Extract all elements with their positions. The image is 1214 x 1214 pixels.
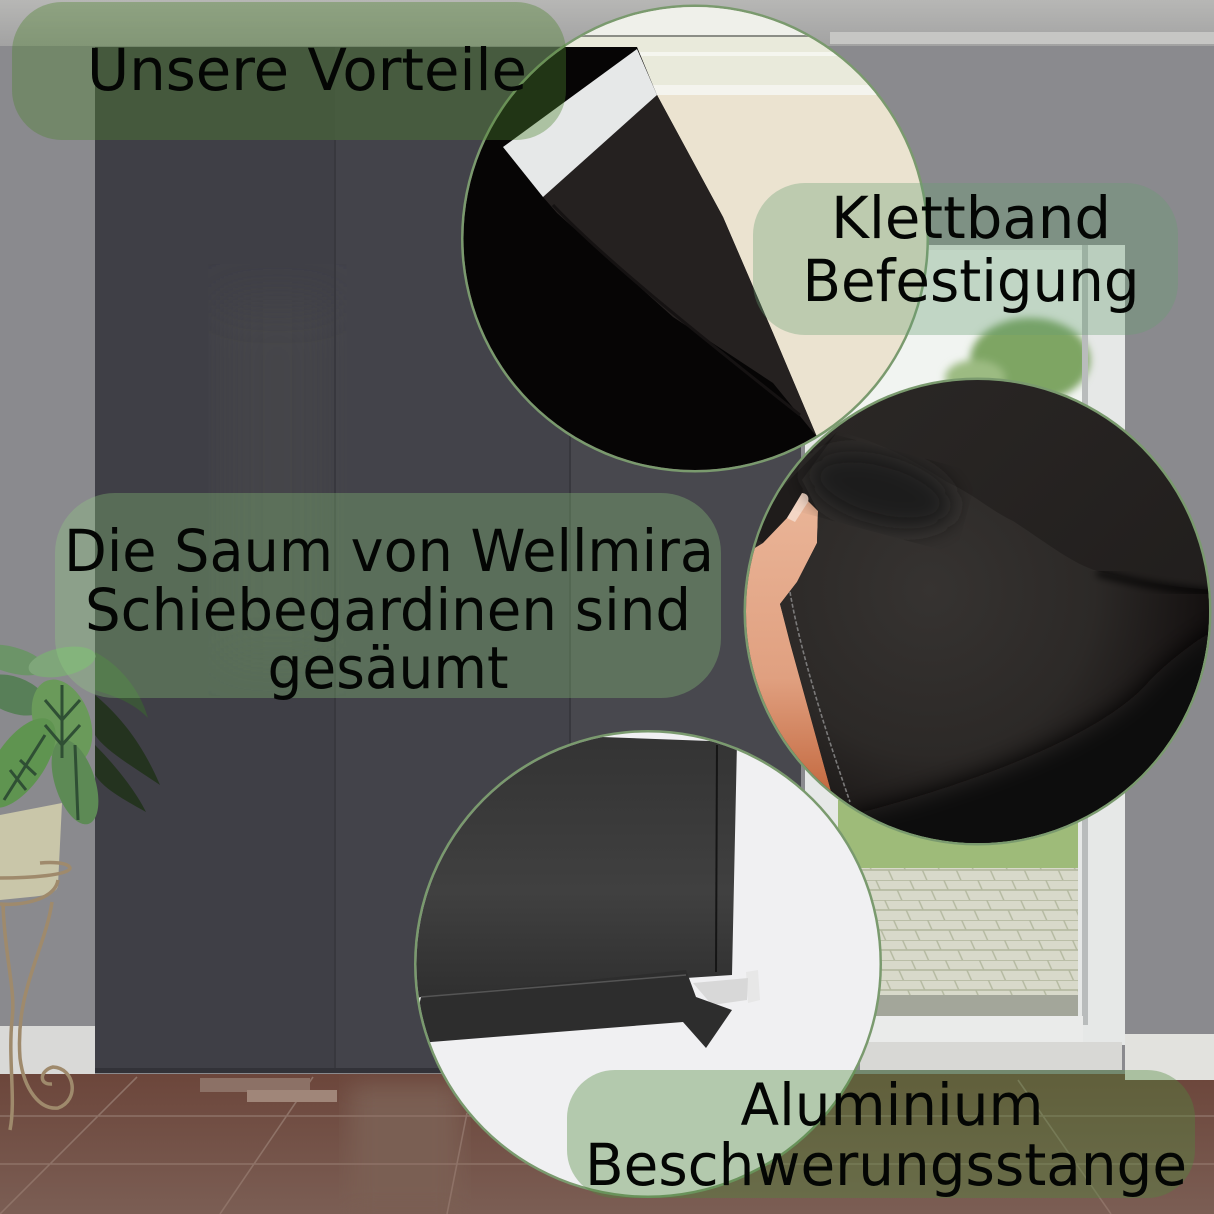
front fabric fold [780,432,1214,860]
window [805,245,1125,1070]
header banner: Unsere Vorteile [12,2,566,140]
callout: Klettband Befestigung: Klettband [831,184,1111,252]
callout: Aluminium Beschwerungsstange: Beschwerungsstange [585,1131,1187,1199]
velcro strip [503,49,657,197]
floor [0,1026,1214,1214]
callout: Klettband Befestigung [753,183,1178,335]
plant on stand [0,639,160,1130]
hand [746,501,831,791]
callout: Saum description: Schiebegardinen sind [85,576,691,644]
callout: Saum description: Die Saum von Wellmira [64,517,714,585]
callout: Aluminium Beschwerungsstange [567,1070,1195,1199]
sliding curtain panels [95,47,801,1073]
pot [0,803,62,900]
callout: Klettband Befestigung: Befestigung [802,247,1140,315]
black inner fabric [450,47,817,480]
callout: Saum description: gesäumt [268,634,508,702]
photo circle: hand holding hem [735,375,1214,870]
photo circle: velcro strip detail [450,0,940,480]
heading: Unsere Vorteile [87,36,527,104]
photo circle: aluminium weight bar [410,725,890,1205]
brown outer fold [543,95,817,437]
callout: Saum description [55,493,721,702]
stand [0,863,72,1130]
callout: Aluminium Beschwerungsstange: Aluminium [740,1071,1044,1139]
